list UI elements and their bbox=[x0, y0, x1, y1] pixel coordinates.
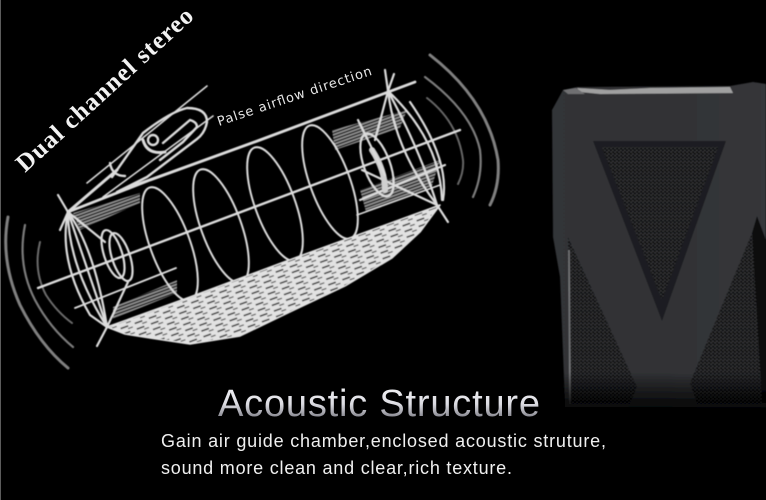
hatched chamber floor bbox=[107, 205, 440, 344]
left driver end bbox=[58, 195, 176, 346]
product: speaker bbox=[545, 82, 766, 500]
top edge bbox=[68, 82, 415, 212]
shaded bands bbox=[73, 110, 440, 319]
bottom fade bbox=[545, 372, 766, 412]
top pulse port bbox=[68, 86, 260, 212]
top silver strip bbox=[577, 87, 733, 94]
description line 1: Gain air guide chamber,enclosed acoustic struture, bbox=[161, 431, 606, 451]
heading: dual channel stereo: Dual channel stereo bbox=[11, 2, 199, 177]
icon: right sound waves bbox=[425, 55, 498, 205]
lower left grille bbox=[568, 237, 637, 404]
lower right grille bbox=[690, 233, 762, 404]
right edge notch bbox=[752, 216, 766, 403]
resonance rings bbox=[131, 119, 369, 307]
right driver end bbox=[353, 70, 448, 222]
label: pulse airflow direction: Palse airflow direction bbox=[216, 64, 374, 130]
description line 2: sound more clean and clear,rich texture. bbox=[161, 458, 512, 478]
upper triangular grille mesh bbox=[602, 147, 718, 300]
title: Acoustic Structure bbox=[218, 383, 540, 425]
central axis bbox=[38, 130, 460, 288]
speaker body bbox=[552, 82, 766, 420]
upper triangular grille frame bbox=[593, 141, 726, 321]
icon: left sound waves bbox=[6, 217, 73, 368]
diagram: acoustic chamber sketch bbox=[38, 70, 460, 346]
description bbox=[161, 431, 606, 478]
